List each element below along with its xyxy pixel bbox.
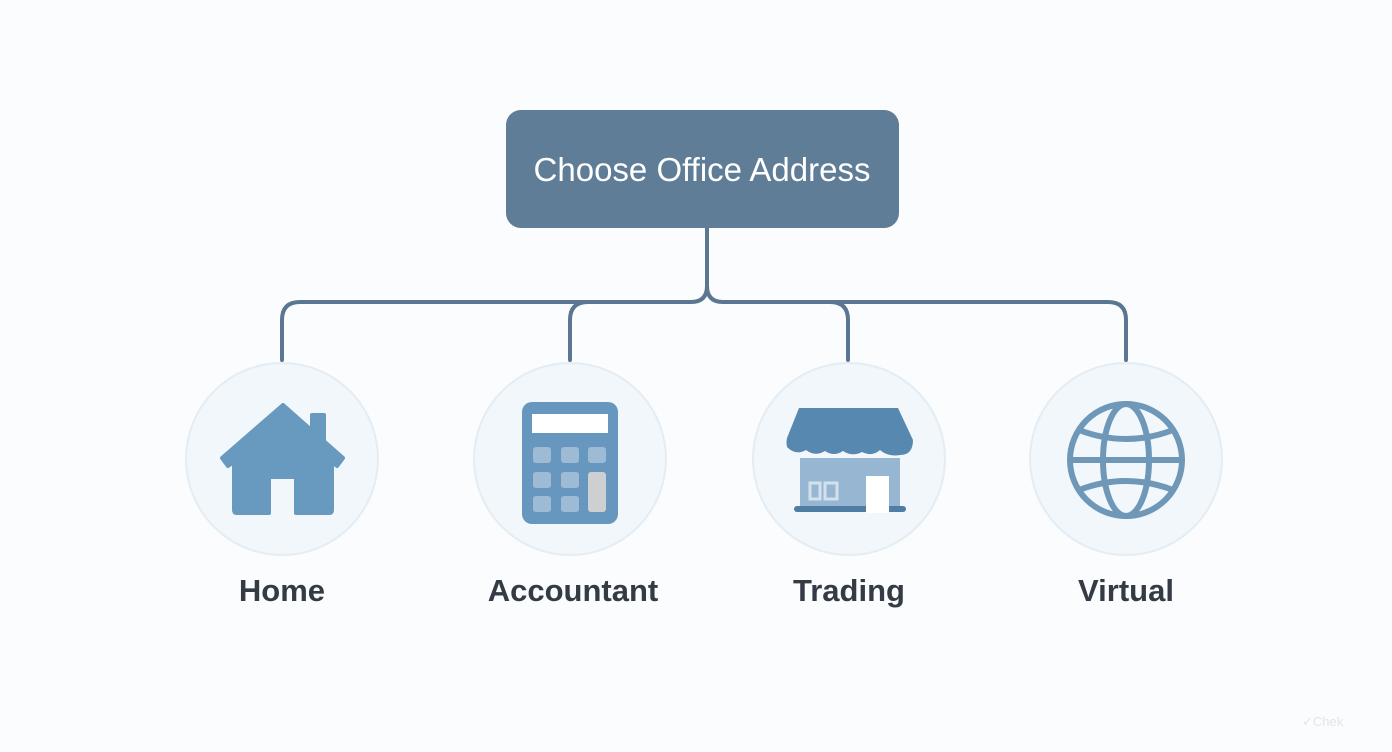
option: Accountant: Accountant — [488, 573, 658, 608]
option: Trading: Trading — [793, 573, 905, 608]
title box — [506, 110, 899, 228]
option: Home: Home — [239, 573, 325, 608]
title box: Choose Office Address — [534, 151, 870, 188]
option: Home — [186, 363, 378, 608]
option: Trading — [753, 363, 945, 608]
option: Virtual: Virtual — [1078, 573, 1174, 608]
connector lines — [282, 228, 1126, 360]
icon: calculator — [522, 402, 618, 524]
icon: globe — [1070, 404, 1182, 516]
icon: house — [222, 405, 343, 513]
icon: store — [786, 408, 913, 513]
option: Accountant — [474, 363, 666, 608]
option: Virtual — [1030, 363, 1222, 608]
watermark: ✓Chek — [1302, 714, 1344, 729]
